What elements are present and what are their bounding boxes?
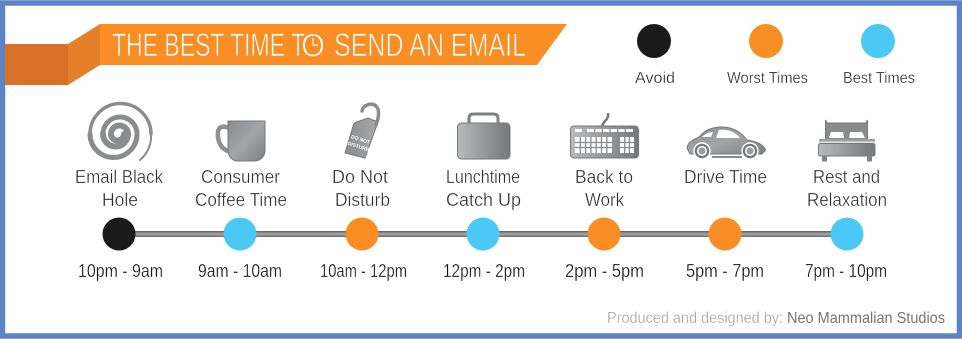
time labels: 9am - 10am bbox=[198, 261, 282, 281]
node: 10pm-9am avoid bbox=[102, 218, 136, 250]
title bbox=[112, 27, 526, 64]
label: do not disturb: Disturb bbox=[335, 189, 390, 210]
legend: avoid: Avoid bbox=[635, 70, 675, 87]
icon: briefcase bbox=[458, 114, 510, 159]
label: lunchtime catch up: Catch Up bbox=[446, 189, 521, 210]
label: rest and relaxation: Rest and bbox=[813, 166, 880, 187]
time labels: 5pm - 7pm bbox=[686, 261, 764, 281]
time labels: 7pm - 10pm bbox=[805, 261, 887, 281]
node: 9am-10am best bbox=[224, 218, 256, 250]
credit line: Produced and designed by: bbox=[607, 310, 783, 327]
title: THE BEST TIME T bbox=[112, 27, 305, 63]
node: 10am-12pm worst bbox=[346, 218, 378, 250]
icon: bed bbox=[818, 120, 875, 162]
icon: coffee mug bbox=[218, 121, 265, 161]
icon: car bbox=[687, 127, 766, 159]
icon: door hanger: DISTURB bbox=[347, 141, 370, 153]
legend: avoid bbox=[635, 24, 675, 87]
timeline bbox=[102, 218, 864, 250]
label: rest and relaxation: Relaxation bbox=[807, 189, 887, 210]
title: O bbox=[301, 28, 325, 64]
time labels: 2pm - 5pm bbox=[565, 261, 644, 281]
label: back to work: Back to bbox=[575, 166, 633, 187]
label: email black hole: Email Black bbox=[75, 166, 164, 187]
label: drive time: Drive Time bbox=[684, 166, 767, 187]
label: lunchtime catch up: Lunchtime bbox=[446, 166, 520, 187]
icon: keyboard bbox=[570, 113, 638, 158]
legend bbox=[635, 24, 915, 87]
time labels: 10am - 12pm bbox=[320, 261, 407, 281]
node: 5pm-7pm worst bbox=[708, 218, 742, 250]
title banner bbox=[5, 24, 567, 85]
icon: door hanger bbox=[345, 104, 379, 158]
legend: worst times bbox=[727, 24, 808, 87]
time labels bbox=[78, 261, 887, 281]
node: 12pm-2pm best bbox=[466, 218, 500, 250]
label: do not disturb: Do Not bbox=[332, 166, 388, 187]
icon: door hanger: DO NOT bbox=[350, 134, 370, 146]
node: 2pm-5pm worst bbox=[588, 218, 620, 250]
legend: best times: Best Times bbox=[843, 70, 915, 87]
label: lunchtime catch up bbox=[446, 166, 521, 210]
time labels: 10pm - 9am bbox=[78, 261, 163, 281]
label: consumer coffee time: Coffee Time bbox=[195, 189, 287, 210]
legend: worst times: Worst Times bbox=[727, 70, 808, 87]
label: back to work: Work bbox=[585, 189, 625, 210]
time labels: 12pm - 2pm bbox=[443, 261, 525, 281]
credit line: Neo Mammalian Studios bbox=[787, 310, 945, 327]
credit line bbox=[607, 310, 945, 327]
label: back to work bbox=[575, 166, 633, 210]
title: SEND AN EMAIL bbox=[334, 27, 526, 63]
legend: best times bbox=[843, 24, 915, 87]
label: rest and relaxation bbox=[807, 166, 887, 210]
node: 7pm-10pm best bbox=[830, 218, 864, 250]
label: email black hole bbox=[75, 166, 164, 210]
label: do not disturb bbox=[332, 166, 390, 210]
label: consumer coffee time: Consumer bbox=[201, 166, 280, 187]
label: email black hole: Hole bbox=[102, 189, 138, 210]
label: consumer coffee time bbox=[195, 166, 287, 210]
icon: spiral bbox=[90, 103, 151, 160]
